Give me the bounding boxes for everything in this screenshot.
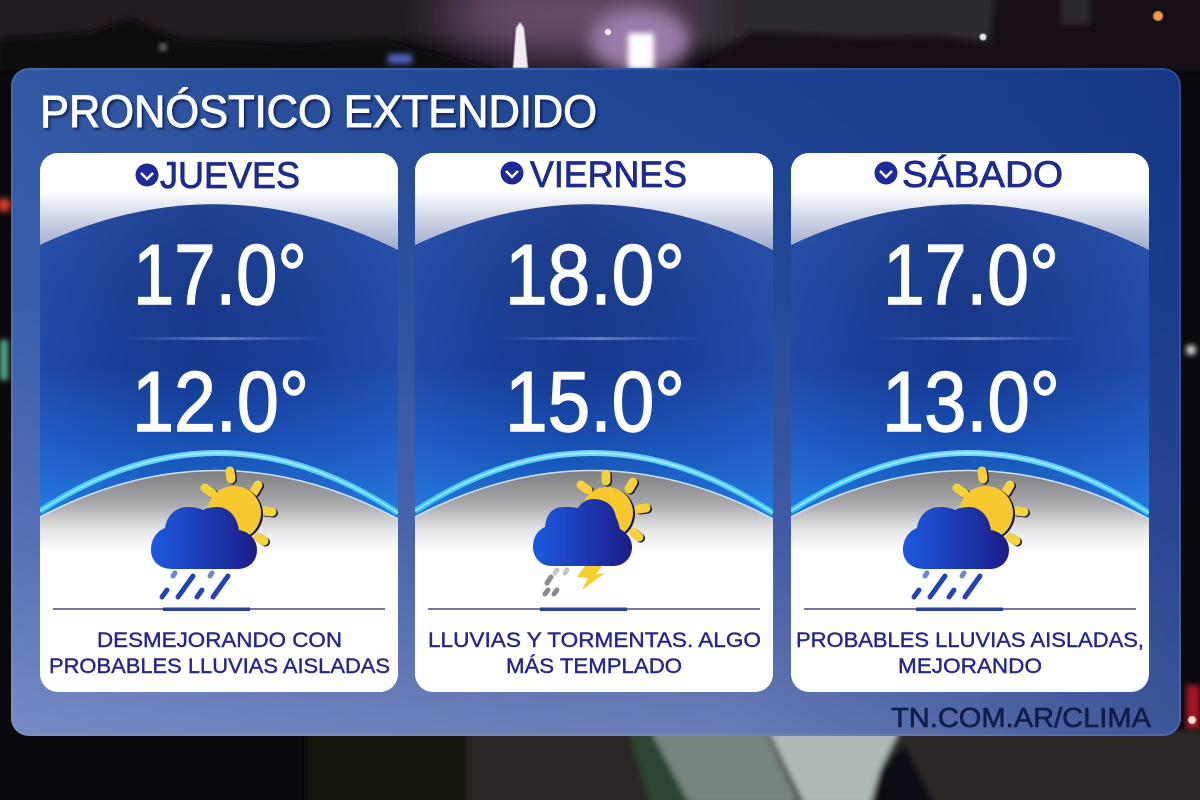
panel: sabado xyxy=(791,153,1149,692)
day heading: jueves: JUEVES xyxy=(160,155,300,196)
icon: sun, cloud, rain and lightning xyxy=(533,474,648,594)
panel: jueves xyxy=(40,153,398,692)
description: MEJORANDO xyxy=(898,655,1042,678)
high temperature: 17.0° xyxy=(883,228,1059,323)
description: DESMEJORANDO CON xyxy=(97,629,342,652)
description: PROBABLES LLUVIAS AISLADAS, xyxy=(796,629,1144,652)
day heading: sabado: SÁBADO xyxy=(902,154,1063,195)
icon: sun, cloud and rain xyxy=(903,471,1026,597)
icon: sun, cloud and rain xyxy=(151,471,274,597)
description xyxy=(428,629,761,678)
description xyxy=(796,629,1144,678)
divider xyxy=(804,608,1136,611)
high temperature: 18.0° xyxy=(505,228,685,323)
high temperature: 17.0° xyxy=(133,228,307,323)
description xyxy=(49,629,390,678)
divider xyxy=(53,608,385,611)
description: PROBABLES LLUVIAS AISLADAS xyxy=(49,655,390,678)
description: MÁS TEMPLADO xyxy=(506,655,682,678)
day heading: viernes: VIERNES xyxy=(530,154,687,195)
description: LLUVIAS Y TORMENTAS. ALGO xyxy=(428,629,761,652)
low temperature: 12.0° xyxy=(132,355,309,450)
source url: TN.COM.AR/CLIMA xyxy=(891,702,1151,733)
low temperature: 13.0° xyxy=(882,355,1060,450)
divider xyxy=(428,608,760,611)
low temperature: 15.0° xyxy=(505,355,685,450)
panel: viernes xyxy=(415,153,773,692)
title: PRONÓSTICO EXTENDIDO xyxy=(40,86,597,137)
